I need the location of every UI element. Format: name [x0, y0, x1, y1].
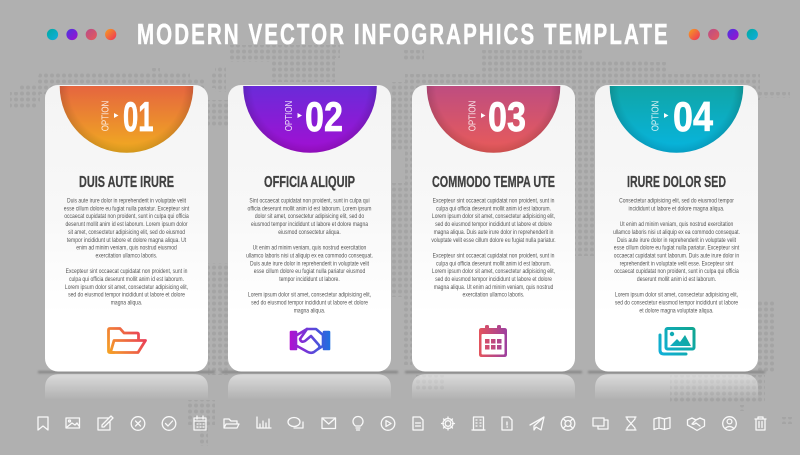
body text: sed do eiusmod tempor incididunt ut labore et dolore [68, 292, 185, 299]
body text: sed do eiusmod tempor incididunt ut labore et dolore [435, 221, 552, 228]
option label: OPTION [99, 101, 111, 131]
body text: Duis aute irure dolor in reprehenderit in voluptate velit [617, 237, 736, 244]
heading: DUIS AUTE IRURE [79, 174, 174, 191]
icon: light bulb [353, 416, 363, 430]
floor shadow [588, 371, 765, 373]
heading: IRURE DOLOR SED [627, 174, 726, 191]
icon: folder outline [224, 419, 239, 428]
body text: Lorem ipsum dolor sit amet, consectetur adipisicing elit, [65, 284, 188, 291]
icon: handshake outline [688, 418, 704, 430]
half circle badge [427, 86, 560, 153]
panel: option 03 [405, 85, 582, 400]
card [595, 85, 758, 372]
body text: ullamco laboris nisi ut aliquip ex ea commodo consequat. [246, 253, 373, 260]
title: MODERN VECTOR INFOGRAPHICS TEMPLATE [137, 20, 668, 51]
right decorative colour dots [689, 29, 758, 40]
body text: Ut enim ad minim veniam, quis nostrud exercitation [620, 221, 733, 228]
reflection [45, 374, 208, 400]
heading: OFFICIA ALIQUIP [264, 174, 355, 191]
card [228, 85, 391, 372]
body text: esse cillum dolore eu fugiat nulla pariatur. Excepteur sint [614, 245, 740, 252]
arrow marker [664, 113, 668, 118]
icon: gear [442, 417, 454, 430]
floor shadow [405, 371, 582, 373]
body text: sed do consectetur eiusmod tempor incididunt ut labore [615, 300, 738, 307]
body text: incididunt ut labore et dolore magna aliqua. [629, 206, 725, 213]
icon: document [413, 417, 423, 430]
icon: bar chart [257, 417, 271, 428]
half circle badge [60, 86, 193, 153]
panel: option 04 [588, 85, 765, 400]
body text: occaecat cupidatat sunt laborum. Duis aute irure dolor in [614, 253, 739, 260]
half circle badge [243, 86, 377, 153]
icon: building [472, 417, 485, 430]
icon: bookmark [38, 417, 48, 430]
body text: magna aliqua. [111, 300, 143, 307]
body text: Lorem ipsum dolor sit amet, consectetur adipisicing elit, [248, 292, 371, 299]
number: 01 [123, 93, 154, 140]
number: 03 [488, 93, 526, 140]
body text: Consectetur adipisicing elit, sed do eiusmod tempor [619, 198, 734, 205]
heading: COMMODO TEMPA UTE [432, 174, 555, 191]
body text: culpa qui officia deserunt mollit anim id est laborum. [436, 206, 551, 213]
body text: esse cillum dolore eu fugiat nulla pariatur eiusmod [254, 269, 365, 275]
icon: map [654, 418, 670, 430]
card [412, 85, 575, 372]
body text: sed do eiusmod tempor incididunt ut labore et dolore [251, 300, 368, 307]
body text [64, 198, 190, 307]
reflection [595, 374, 758, 400]
arrow marker [114, 113, 118, 118]
icon: paper plane [530, 417, 544, 430]
icon: folder [108, 328, 146, 352]
body text: esse cillum dolore eu fugiat nulla pariatur. Excepteur sint [64, 206, 190, 213]
icon: close circle [131, 417, 145, 430]
reflection [412, 374, 575, 400]
floor shadow [38, 371, 215, 373]
icon: chat bubbles [288, 418, 303, 428]
half circle badge [610, 86, 743, 153]
panel: option 01 [38, 85, 215, 400]
icon: check circle [162, 417, 176, 430]
body text: Lorem ipsum dolor sit amet, consectetur adipisicing elit, [615, 292, 738, 299]
body text: tempor incididunt ut labore et dolore magna aliqua. Ut [67, 237, 186, 244]
body text: tempor incididunt ut labore. [279, 276, 340, 283]
icon: trash [755, 417, 766, 430]
icon: calendar outline [194, 416, 206, 430]
body text: enim ad minim veniam, quis nostrud eiusmod [76, 245, 177, 252]
icon: edit [98, 416, 113, 430]
card [45, 85, 208, 372]
body text: Excepteur sint occaecat cupidatat non proident, sunt in [433, 253, 554, 260]
body text: Duis aute irure dolor in reprehenderit in voluptate velit [250, 261, 369, 268]
body text: sit amet, consectetur adipisicing elit, sed do eiusmod [68, 229, 185, 236]
icon row [38, 416, 766, 430]
icon: life ring [561, 417, 575, 430]
body text: deserunt mollit anim id est laborum. [637, 276, 716, 283]
icon: handshake [291, 329, 329, 353]
body text: exercitation ullamco laboris. [96, 253, 158, 260]
body text: Lorem ipsum dolor sit amet, consectetur adipisicing elit, [432, 214, 555, 220]
icon: hourglass [626, 417, 636, 430]
body text: exercitation ullamco laboris. [463, 292, 525, 299]
body text: occaecat cupidatat non proident, sunt in culpa qui officia [614, 269, 739, 275]
body text: Duis aute irure dolor in reprehenderit in voluptate velit [67, 198, 186, 205]
left decorative colour dots [47, 29, 116, 40]
body text: officia deserunt mollit anim id est laborum. Lorem ipsum [248, 206, 372, 213]
body text: eiusmod consectetur aliqua. [278, 229, 341, 236]
body text: culpa qui officia deserunt mollit anim id est laborum. [436, 261, 551, 268]
icon: picture [66, 418, 80, 428]
icon: resize frames [593, 418, 608, 429]
icon: play circle [381, 417, 395, 430]
option label: OPTION [649, 101, 661, 131]
body text: Sint occaecat cupidatat non proident, sunt in culpa qui [249, 198, 370, 205]
option label: OPTION [283, 101, 294, 131]
body text: Excepteur sint occaecat cupidatat non proident, sunt in [66, 269, 187, 275]
body text: magna aliqua. Duis aute irure dolor in reprehenderit in [434, 229, 553, 236]
arrow marker [481, 113, 486, 118]
body text [431, 198, 556, 299]
icon: envelope [322, 418, 336, 428]
body text: magna aliqua. [294, 308, 326, 315]
body text [613, 198, 740, 315]
panel: option 02 [221, 85, 398, 400]
option label: OPTION [466, 101, 478, 131]
icon: file with mark [502, 417, 512, 430]
body text: reprehenderit in voluptate velit esse. Excepteur sint [620, 261, 734, 268]
arrow marker [298, 113, 302, 118]
body text: dolor sit amet, consectetur adipisicing elit, sed do [255, 214, 365, 220]
body text: Lorem ipsum dolor sit amet, consectetur adipisicing elit, [432, 269, 555, 275]
number: 02 [305, 93, 343, 140]
body text: Excepteur sint occaecat cupidatat non proident, sunt in [433, 198, 554, 205]
body text: et dolore magna voluptate aliqua. [639, 308, 714, 315]
body text: eiusmod tempor incididunt ut labore et dolore magna [251, 221, 369, 228]
body text: ullamco laboris nisi ut aliquip ex ea commodo consequat. [613, 229, 740, 236]
body text: sed do eiusmod tempor incididunt ut labore et dolore [435, 276, 552, 283]
body text: magna aliqua. Ut enim ad minim veniam, quis nostrud [434, 284, 553, 291]
body text: voluptate velit esse cillum dolore eu fugiat nulla pariatur. [431, 237, 556, 244]
body text: occaecat cupidatat non proident, sunt in culpa qui officia [64, 214, 189, 220]
body text: deserunt mollit anim id est laborum. Lorem ipsum dolor [65, 221, 188, 228]
body text [246, 198, 373, 315]
number: 04 [673, 93, 714, 140]
body text: Ut enim ad minim veniam, quis nostrud exercitation [253, 245, 366, 252]
icon: pictures [660, 328, 694, 354]
icon: user circle [723, 417, 736, 430]
reflection [228, 374, 391, 400]
body text: culpa qui officia deserunt mollit anim id est laborum. [69, 276, 184, 283]
icon: calendar [479, 325, 507, 357]
floor shadow [221, 371, 398, 373]
